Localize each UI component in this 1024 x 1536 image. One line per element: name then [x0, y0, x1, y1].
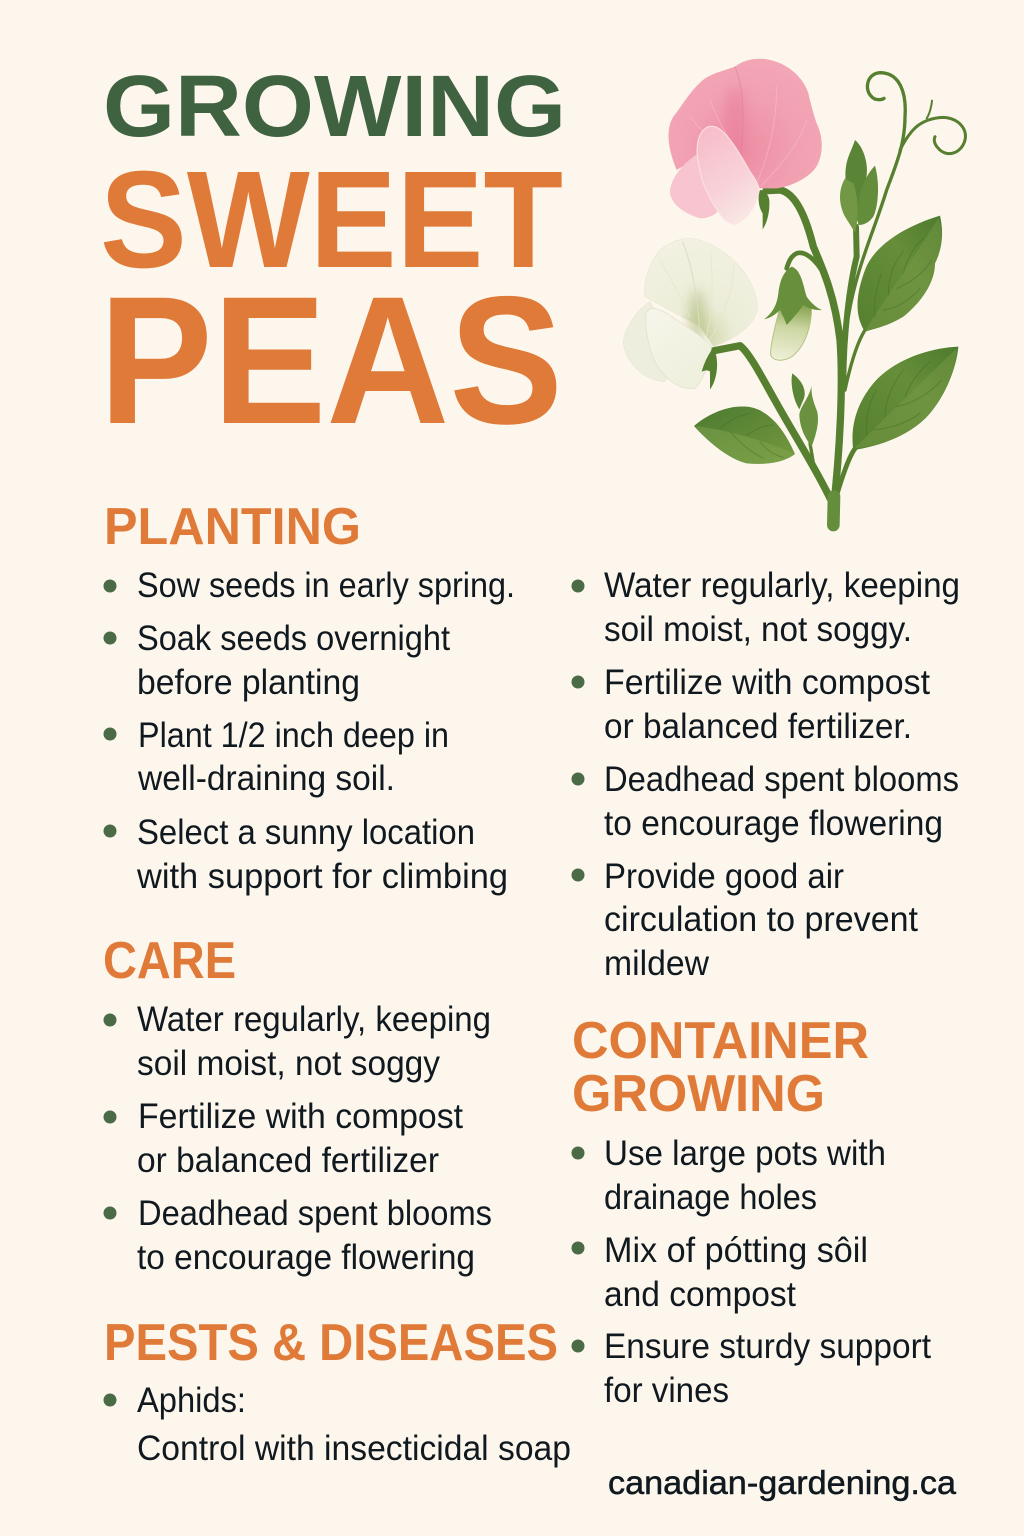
- pink flower: [669, 59, 822, 229]
- item: water: [572, 566, 960, 649]
- item: aphids: [104, 1381, 571, 1468]
- title line: peas: PEAS: [99, 258, 563, 462]
- section heading: container growing: CONTAINER: [572, 1012, 869, 1070]
- item: sunny location: Select a sunny location: [137, 813, 475, 852]
- section heading: pests and diseases: PESTS & DISEASES: [104, 1314, 558, 1372]
- item: plant depth: [104, 716, 449, 798]
- item: fertilize: Fertilize with compost: [604, 663, 930, 702]
- item: sunny location: [104, 813, 508, 896]
- item: sow seeds: Sow seeds in early spring.: [137, 566, 515, 605]
- title line: growing: GROWING: [103, 58, 566, 155]
- white flower lower wing: [623, 302, 677, 382]
- item: deadhead: Deadhead spent blooms: [138, 1194, 492, 1233]
- item: soak seeds: [104, 619, 450, 702]
- container growing list: [572, 1134, 931, 1410]
- right column care list: [572, 566, 960, 983]
- small lower bud: [792, 373, 818, 447]
- item: potting mix: Mix of pótting sôil: [604, 1231, 868, 1270]
- lower right leaf: [852, 347, 958, 450]
- white flower calyx: [702, 350, 717, 389]
- left leaf: [694, 406, 795, 464]
- item: plant depth: Plant 1/2 inch deep in: [138, 716, 449, 755]
- item: large pots: drainage holes: [604, 1178, 817, 1217]
- item: water: Water regularly, keeping: [137, 1000, 491, 1039]
- pests list: [104, 1381, 571, 1468]
- item: fertilize: Fertilize with compost: [138, 1097, 463, 1136]
- title: [99, 58, 566, 462]
- upper bud: [840, 140, 878, 233]
- item: soak seeds: before planting: [137, 663, 360, 702]
- item: sunny location: with support for climbing: [136, 857, 508, 896]
- item: large pots: Use large pots with: [604, 1134, 886, 1173]
- item: fertilize: [572, 663, 930, 746]
- item: air circulation: mildew: [604, 944, 710, 983]
- website credit: canadian-gardening.ca: [608, 1464, 957, 1501]
- item: deadhead: to encourage flowering: [604, 804, 943, 843]
- stems and tendrils: [714, 73, 965, 525]
- item: air circulation: circulation to prevent: [604, 900, 918, 939]
- item: sturdy support: for vines: [604, 1371, 729, 1410]
- section heading: container growing: [572, 1012, 869, 1123]
- pink flower crease shading: [724, 87, 746, 167]
- item: aphids: Control with insecticidal soap: [137, 1429, 571, 1468]
- item: potting mix: and compost: [604, 1275, 796, 1314]
- item: water: soil moist, not soggy.: [604, 610, 912, 649]
- item: plant depth: well-draining soil.: [137, 759, 395, 798]
- section heading: care: CARE: [103, 932, 236, 990]
- item: sturdy support: Ensure sturdy support: [604, 1327, 931, 1366]
- planting list: [104, 566, 515, 896]
- title line: sweet: SWEET: [100, 143, 563, 297]
- pink flower lower wing: [670, 154, 717, 218]
- pink flower back petal: [669, 59, 822, 188]
- item: potting mix: [572, 1231, 868, 1314]
- white flower crease shading: [689, 290, 705, 343]
- item: water: [104, 1000, 491, 1083]
- item: aphids: Aphids:: [137, 1381, 246, 1420]
- drooping bud: [764, 267, 822, 360]
- pink flower front wing: [697, 126, 759, 224]
- white flower front wing: [646, 309, 712, 389]
- care list: [104, 1000, 492, 1277]
- item: deadhead: Deadhead spent blooms: [604, 760, 959, 799]
- item: deadhead: [572, 760, 959, 843]
- item: soak seeds: Soak seeds overnight: [137, 619, 450, 658]
- item: air circulation: [572, 857, 918, 983]
- illustration: sweet pea plant: [623, 59, 965, 525]
- section heading: planting: PLANTING: [104, 498, 361, 556]
- section heading: container growing: GROWING: [572, 1065, 825, 1123]
- item: water: soil moist, not soggy: [137, 1044, 440, 1083]
- pink flower calyx: [759, 190, 769, 229]
- item: fertilize: or balanced fertilizer: [137, 1141, 439, 1180]
- item: deadhead: to encourage flowering: [137, 1238, 475, 1277]
- item: fertilize: or balanced fertilizer.: [604, 707, 912, 746]
- upper right leaf: [857, 216, 942, 332]
- item: sturdy support: [572, 1327, 931, 1410]
- item: air circulation: Provide good air: [604, 857, 844, 896]
- item: water: Water regularly, keeping: [604, 566, 960, 605]
- item: large pots: [572, 1134, 886, 1217]
- item: fertilize: [104, 1097, 463, 1180]
- white flower: [623, 238, 757, 389]
- white flower back petal: [645, 238, 757, 347]
- item: deadhead: [104, 1194, 492, 1277]
